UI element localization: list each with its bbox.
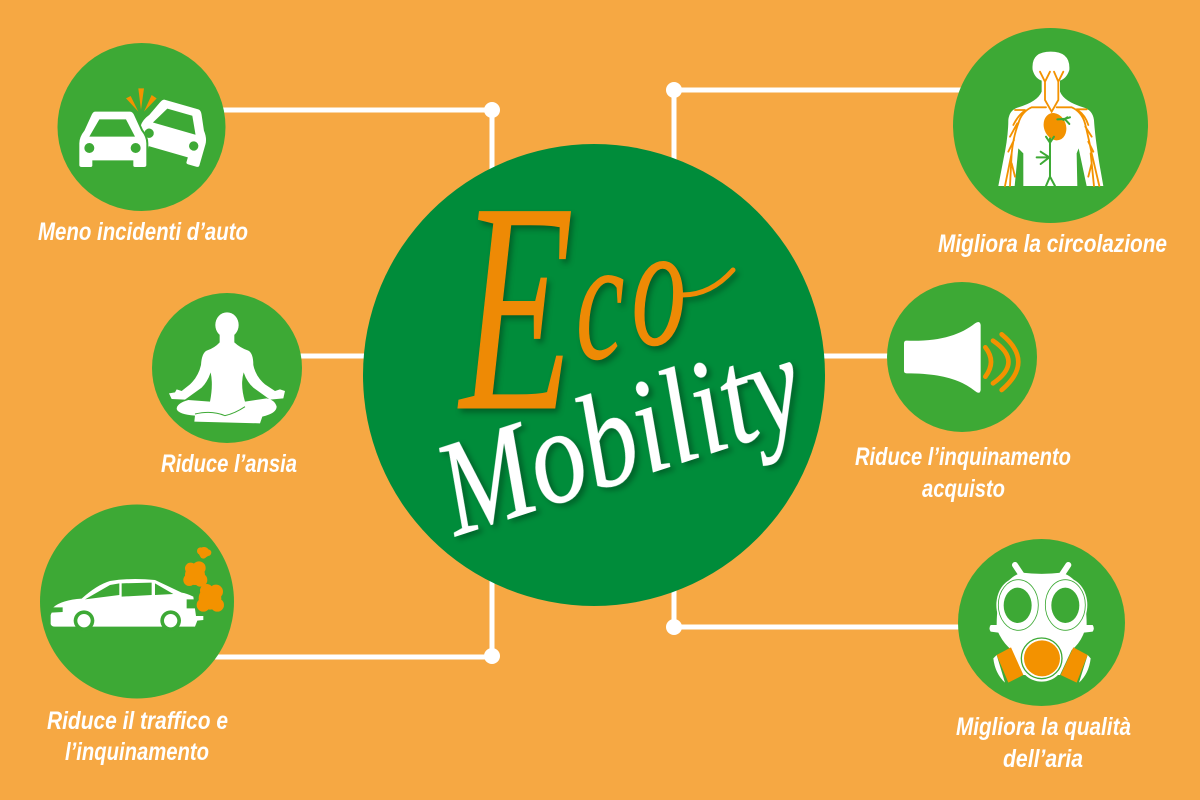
caption: Migliora la qualità dell'aria: dell’aria: [1003, 745, 1083, 773]
panel: circulation: [953, 28, 1148, 223]
caption: Riduce il traffico e l'inquinamento: [47, 707, 228, 766]
panel: anxiety: [152, 293, 302, 443]
panel: car crash: [58, 43, 226, 211]
panel: traffic and pollution: [40, 504, 234, 698]
caption: Riduce l'inquinamento acquisto: acquisto: [922, 475, 1005, 503]
icon: human torso with blood vessels: [998, 52, 1103, 186]
caption: Riduce l'inquinamento acquisto: Riduce l’inquinamento: [855, 443, 1071, 471]
caption: Migliora la qualità dell'aria: Migliora la qualità: [956, 713, 1131, 741]
title: Eco: [458, 141, 733, 473]
title: Eco: c: [576, 203, 624, 396]
icon: meditating person: [169, 312, 285, 423]
central circle with title: [363, 141, 825, 606]
title: Eco: E: [460, 141, 574, 473]
connector dot: bottom right: [666, 619, 682, 635]
panel: air quality: [958, 539, 1125, 706]
panel: noise pollution: [887, 282, 1037, 432]
title: Mobility: Mobility: [418, 308, 819, 565]
caption: Riduce il traffico e l'inquinamento: l’inquinamento: [65, 738, 209, 766]
icon: car with exhaust smoke: [51, 547, 224, 631]
connector dot: top right: [666, 82, 682, 98]
caption: Riduce il traffico e l'inquinamento: Riduce il traffico e: [47, 707, 228, 735]
icon: megaphone with sound waves: [904, 322, 1018, 393]
connector dot: top left: [484, 102, 500, 118]
icon: two crashed cars: [78, 88, 215, 168]
caption: Migliora la qualità dell'aria: [956, 713, 1131, 773]
caption: Riduce l'inquinamento acquisto: [855, 443, 1071, 503]
title: Eco: o: [632, 189, 686, 382]
icon: gas mask: [989, 565, 1094, 683]
caption: Riduce l'ansia: Riduce l’ansia: [161, 450, 297, 478]
caption: Meno incidenti d'auto: Meno incidenti d’auto: [38, 218, 248, 246]
connector dot: bottom left: [484, 648, 500, 664]
